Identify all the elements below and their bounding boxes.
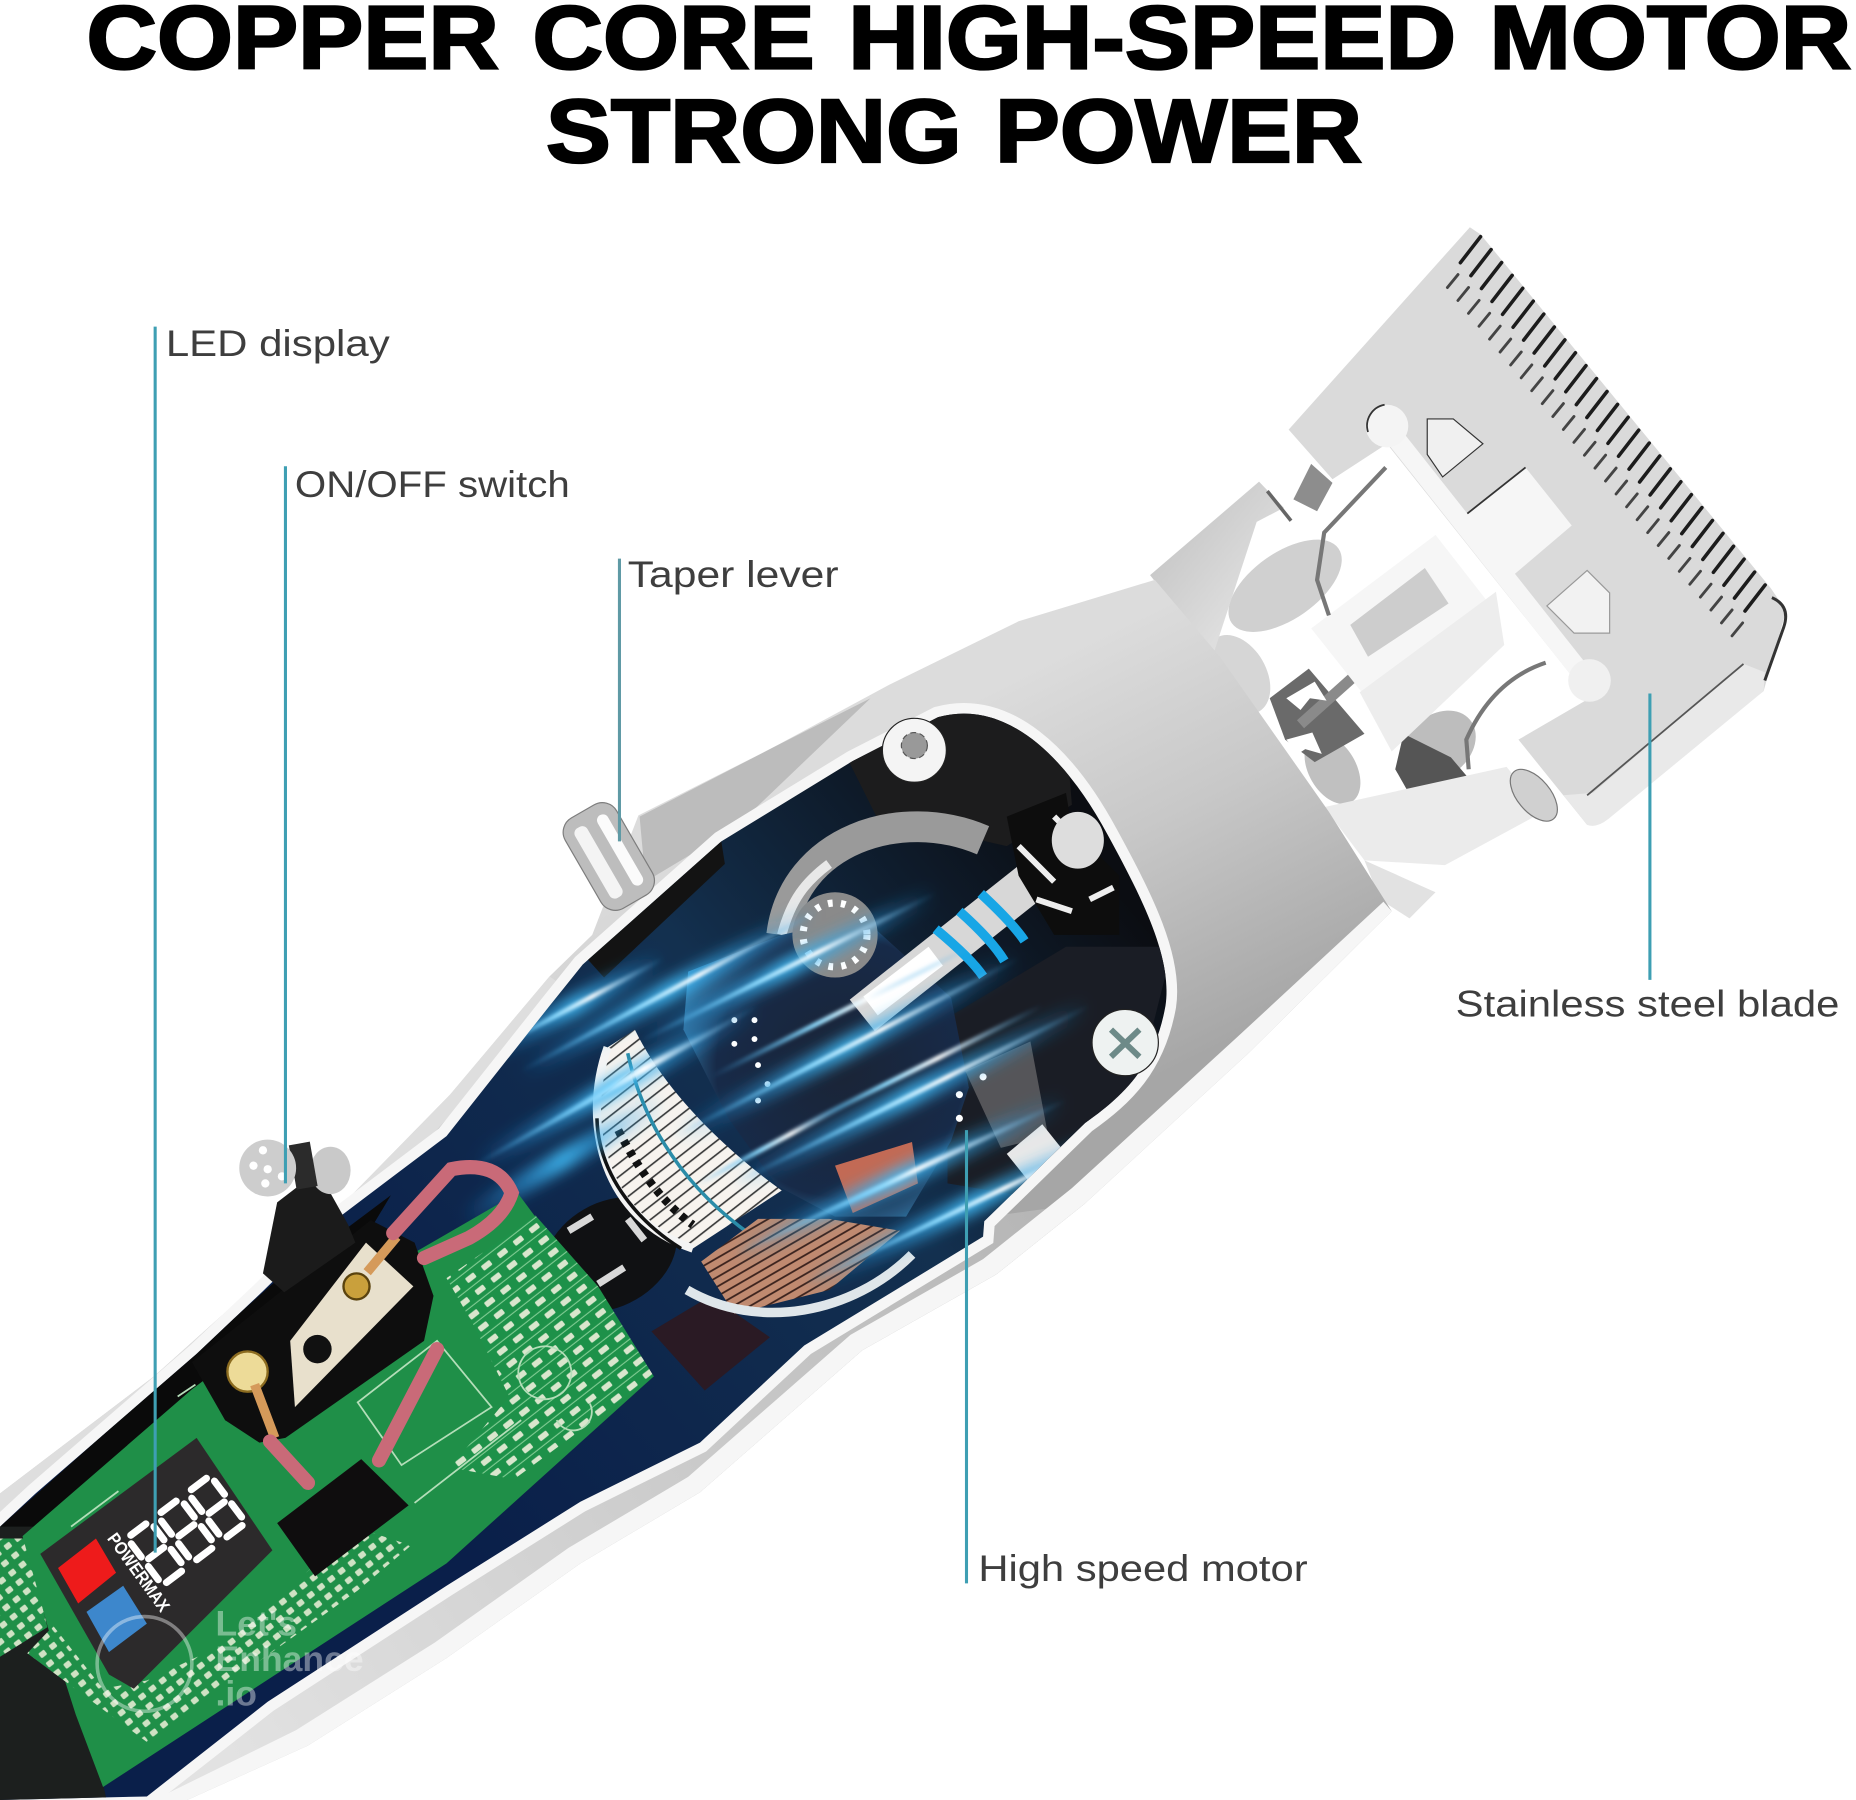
motor shaft bbox=[862, 873, 1041, 1015]
commutator stripes bbox=[597, 1030, 782, 1249]
short blade teeth bbox=[1447, 275, 1743, 636]
motor cylinder bbox=[683, 917, 969, 1217]
module brand: POWERMAX bbox=[103, 1529, 174, 1616]
spring ends bbox=[1293, 464, 1332, 511]
strap hinge bbox=[1501, 761, 1566, 829]
black side tab bbox=[583, 841, 725, 978]
title: STRONG POWER bbox=[546, 82, 1362, 182]
watermark: Let's bbox=[216, 1604, 297, 1643]
title bbox=[86, 0, 1851, 182]
taper lever knob bbox=[557, 797, 660, 916]
lower nub bbox=[1364, 860, 1436, 918]
watermark bbox=[97, 1604, 364, 1713]
callout: LED display: LED display bbox=[166, 323, 390, 364]
gear bbox=[792, 892, 878, 978]
lower wing strap bbox=[1324, 767, 1543, 865]
seven segment digits bbox=[127, 1475, 246, 1585]
switch plate hole bbox=[303, 1335, 332, 1363]
white guide bar bbox=[1387, 427, 1592, 686]
watermark: Enhance bbox=[216, 1639, 364, 1679]
maroon lower detail bbox=[651, 1296, 770, 1391]
blade corner bbox=[1765, 598, 1786, 680]
black top mount bbox=[850, 714, 1072, 846]
LED display module bbox=[40, 1438, 272, 1689]
lower right dark machinery bbox=[948, 947, 1173, 1195]
red winding highlights bbox=[835, 1142, 918, 1213]
long blade teeth bbox=[1460, 237, 1765, 611]
watermark: .io bbox=[216, 1673, 257, 1713]
top silver strip bbox=[0, 976, 566, 1521]
interior background bbox=[0, 714, 1166, 1800]
commutator rim bbox=[597, 1047, 693, 1249]
central white block bbox=[1463, 467, 1572, 580]
black switch housing bbox=[192, 1220, 434, 1443]
left edge pads bbox=[0, 1538, 47, 1657]
lower blade step bbox=[1563, 664, 1765, 826]
callout: Stainless steel blade: Stainless steel blade bbox=[1456, 984, 1839, 1025]
left edge dark circuitry bbox=[0, 1527, 107, 1800]
speed streak glow bbox=[462, 893, 1137, 1284]
on/off switch post bbox=[263, 1175, 355, 1292]
on/off switch knob bbox=[239, 1140, 351, 1196]
rear metal mechanism bbox=[1192, 521, 1490, 814]
copper windings bbox=[701, 1219, 900, 1314]
callout: High speed motor: High speed motor bbox=[978, 1548, 1308, 1589]
blue shaft rings bbox=[936, 893, 1025, 976]
brass ring bbox=[227, 1351, 268, 1392]
clipper housing bbox=[0, 580, 1392, 1800]
callout: Taper lever: Taper lever bbox=[628, 554, 839, 595]
silver plate behind lever bbox=[640, 698, 871, 882]
lower silver band bbox=[118, 1204, 1085, 1800]
capacitor block bbox=[277, 1459, 409, 1576]
dark strip top left bbox=[0, 1195, 391, 1550]
motor dots bbox=[731, 1017, 987, 1122]
window rim bbox=[0, 714, 1167, 1800]
lower pads bbox=[27, 1528, 411, 1742]
cutaway interior bbox=[0, 714, 1166, 1800]
lower white edge bbox=[154, 902, 1392, 1800]
red button bbox=[58, 1538, 116, 1604]
speed streaks bbox=[482, 896, 1082, 1280]
guide bar round ends bbox=[1366, 405, 1611, 702]
blade plate bbox=[1289, 227, 1786, 825]
red wires bbox=[270, 1167, 512, 1483]
blade assembly bbox=[1150, 227, 1786, 918]
central slider bbox=[1311, 535, 1498, 712]
mounting screw bottom bbox=[1092, 1009, 1158, 1076]
circuit board bbox=[23, 1193, 654, 1787]
shaft end details bbox=[1007, 793, 1119, 935]
blade windows bbox=[1427, 419, 1483, 477]
motor rear machinery bbox=[554, 1198, 676, 1310]
brass lug bbox=[255, 1237, 397, 1438]
lower white winding band bbox=[687, 1254, 912, 1313]
grey motor ring bbox=[782, 827, 983, 935]
lower motor grey detail bbox=[965, 1041, 1048, 1148]
wire springs bbox=[1317, 467, 1546, 769]
mounting screw top bbox=[882, 718, 946, 782]
blue button bbox=[86, 1586, 147, 1652]
switch contact plate bbox=[290, 1243, 413, 1407]
callout: ON/OFF switch: ON/OFF switch bbox=[295, 464, 570, 505]
teal motor curve bbox=[626, 1052, 745, 1231]
traces bbox=[70, 1340, 593, 1528]
upper wing strap bbox=[1150, 482, 1284, 656]
housing boss bbox=[1052, 812, 1104, 869]
brass screw bbox=[343, 1273, 370, 1299]
right pads bbox=[447, 1215, 654, 1479]
